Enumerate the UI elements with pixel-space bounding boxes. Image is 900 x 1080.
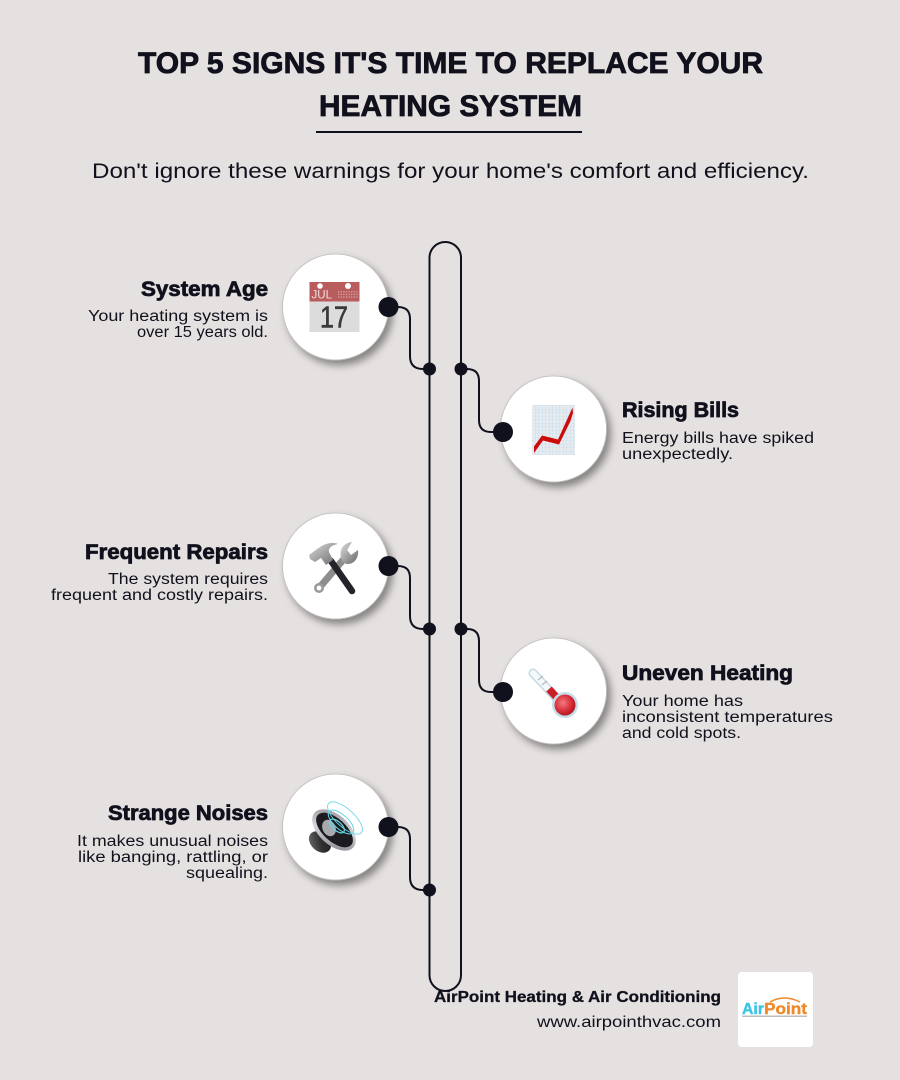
body: strange noises: like banging, rattling, or [78, 849, 268, 866]
small node [423, 622, 436, 636]
heading: system age: System Age [141, 278, 268, 301]
connector dot [493, 682, 513, 702]
connector: rising bills [461, 369, 503, 432]
icon: speaker [305, 797, 367, 859]
panel: uneven heating [454, 622, 833, 744]
body: uneven heating [622, 693, 833, 742]
body: rising bills: Energy bills have spiked [622, 430, 814, 447]
icon: calendar: JUL [312, 288, 332, 302]
title: HEATING SYSTEM [319, 90, 582, 123]
body: rising bills [622, 430, 814, 463]
icon: hammer and wrench [309, 542, 358, 593]
title [138, 47, 763, 133]
logo [738, 972, 813, 1047]
body: system age: Your heating system is [88, 308, 268, 325]
body: strange noises [77, 833, 268, 882]
panel: system age [88, 254, 436, 376]
circle [282, 513, 388, 619]
logo: Point [764, 1001, 808, 1018]
body: system age: over 15 years old. [137, 324, 268, 341]
body: uneven heating: inconsistent temperatures [622, 709, 833, 726]
circle [282, 774, 388, 880]
footer: company name: AirPoint Heating & Air Conditioning [434, 989, 721, 1006]
circle [282, 254, 388, 360]
panel: rising bills [454, 362, 814, 482]
body: system age [88, 308, 268, 341]
connector: strange noises [389, 827, 429, 890]
panel: frequent repairs [51, 513, 436, 636]
connector dot [378, 556, 398, 576]
small node [423, 884, 436, 896]
subtitle: Don't ignore these warnings for your home's comfort and efficiency. [92, 159, 809, 183]
heading: frequent repairs: Frequent Repairs [85, 541, 268, 564]
connector dot [378, 297, 398, 317]
body: frequent repairs: frequent and costly repairs. [51, 587, 268, 604]
body: uneven heating: Your home has [622, 693, 743, 710]
icon: calendar: 17 [320, 300, 348, 334]
connector dot [378, 817, 398, 837]
connector: system age [389, 307, 429, 369]
timeline track [430, 242, 461, 991]
heading: rising bills: Rising Bills [622, 399, 739, 422]
connector dot [493, 422, 513, 442]
logo: Air [742, 1001, 764, 1018]
body: uneven heating: and cold spots. [622, 725, 741, 742]
small node [423, 362, 436, 376]
panel: strange noises [77, 774, 436, 896]
body: strange noises: squealing. [186, 865, 268, 882]
body: frequent repairs: The system requires [108, 571, 268, 588]
circle [500, 376, 606, 482]
icon: rising chart [532, 405, 575, 455]
body: rising bills: unexpectedly. [622, 446, 733, 463]
circle [500, 638, 606, 744]
heading: uneven heating: Uneven Heating [622, 662, 793, 685]
small node [454, 622, 468, 636]
connector: uneven heating [461, 629, 503, 692]
heading: strange noises: Strange Noises [108, 802, 268, 825]
body: frequent repairs [51, 571, 268, 604]
body: strange noises: It makes unusual noises [77, 833, 268, 850]
icon: calendar [310, 282, 360, 334]
connector: frequent repairs [389, 566, 429, 629]
small node [454, 362, 468, 376]
footer: website: www.airpointhvac.com [536, 1014, 721, 1031]
title: TOP 5 SIGNS IT'S TIME TO REPLACE YOUR [138, 47, 763, 80]
icon: thermometer [533, 673, 578, 718]
